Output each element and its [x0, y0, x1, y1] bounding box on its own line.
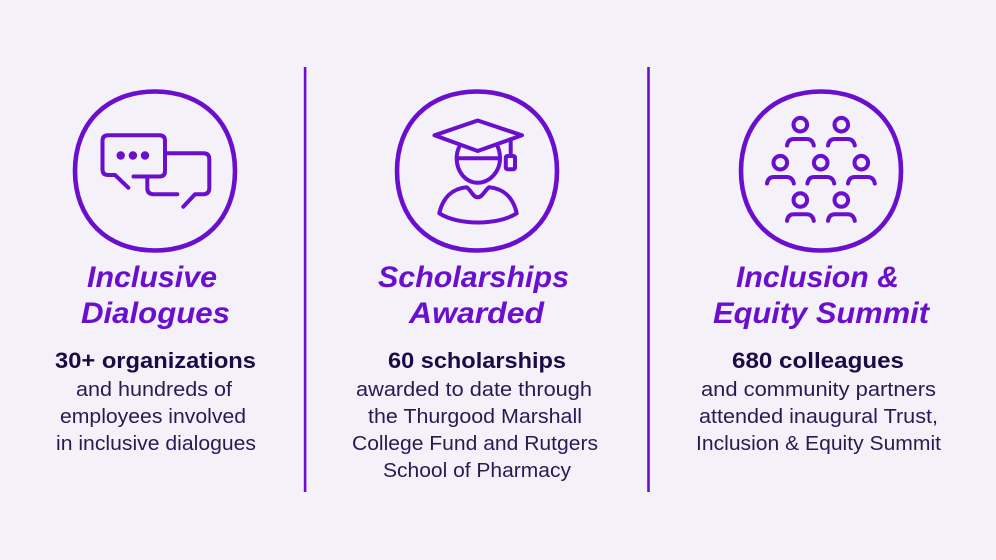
text: scholarships: [352, 348, 598, 482]
heading: Scholarships Awarded: [378, 261, 569, 330]
text: colleagues: 680 colleagues: [732, 348, 904, 373]
heading: Inclusive Dialogues: Dialogues: [81, 297, 230, 330]
text: organizations: 30+ organizations: [55, 348, 256, 373]
heading: Inclusive Dialogues: [81, 261, 230, 330]
panel: Scholarships Awarded: [352, 92, 598, 482]
panel: Inclusion & Equity Summit: [696, 92, 941, 455]
icon: group of people: [741, 92, 901, 250]
text: colleagues: [696, 348, 941, 455]
heading: Scholarships Awarded: Scholarships: [378, 261, 569, 294]
text: colleagues: Inclusion & Equity Summit: [696, 433, 941, 455]
text: scholarships: School of Pharmacy: [383, 460, 571, 482]
text: organizations: [55, 348, 256, 455]
heading: Scholarships Awarded: Awarded: [408, 297, 545, 330]
text: colleagues: and community partners: [701, 379, 936, 401]
heading: Inclusion & Equity Summit: Equity Summit: [713, 297, 931, 330]
text: organizations: in inclusive dialogues: [56, 433, 256, 455]
text: organizations: employees involved: [60, 406, 246, 428]
text: organizations: and hundreds of: [76, 379, 232, 401]
heading: Inclusion & Equity Summit: Inclusion &: [736, 261, 899, 294]
icon: graduate: [397, 92, 557, 250]
text: colleagues: attended inaugural Trust,: [699, 406, 938, 428]
heading: Inclusion & Equity Summit: [713, 261, 931, 330]
text: scholarships: awarded to date through: [356, 379, 592, 401]
text: scholarships: 60 scholarships: [388, 348, 566, 373]
text: scholarships: the Thurgood Marshall: [368, 406, 582, 428]
heading: Inclusive Dialogues: Inclusive: [87, 261, 217, 294]
icon: chat bubbles: [75, 92, 235, 250]
text: scholarships: College Fund and Rutgers: [352, 433, 598, 455]
panel: Inclusive Dialogues: [55, 92, 256, 455]
